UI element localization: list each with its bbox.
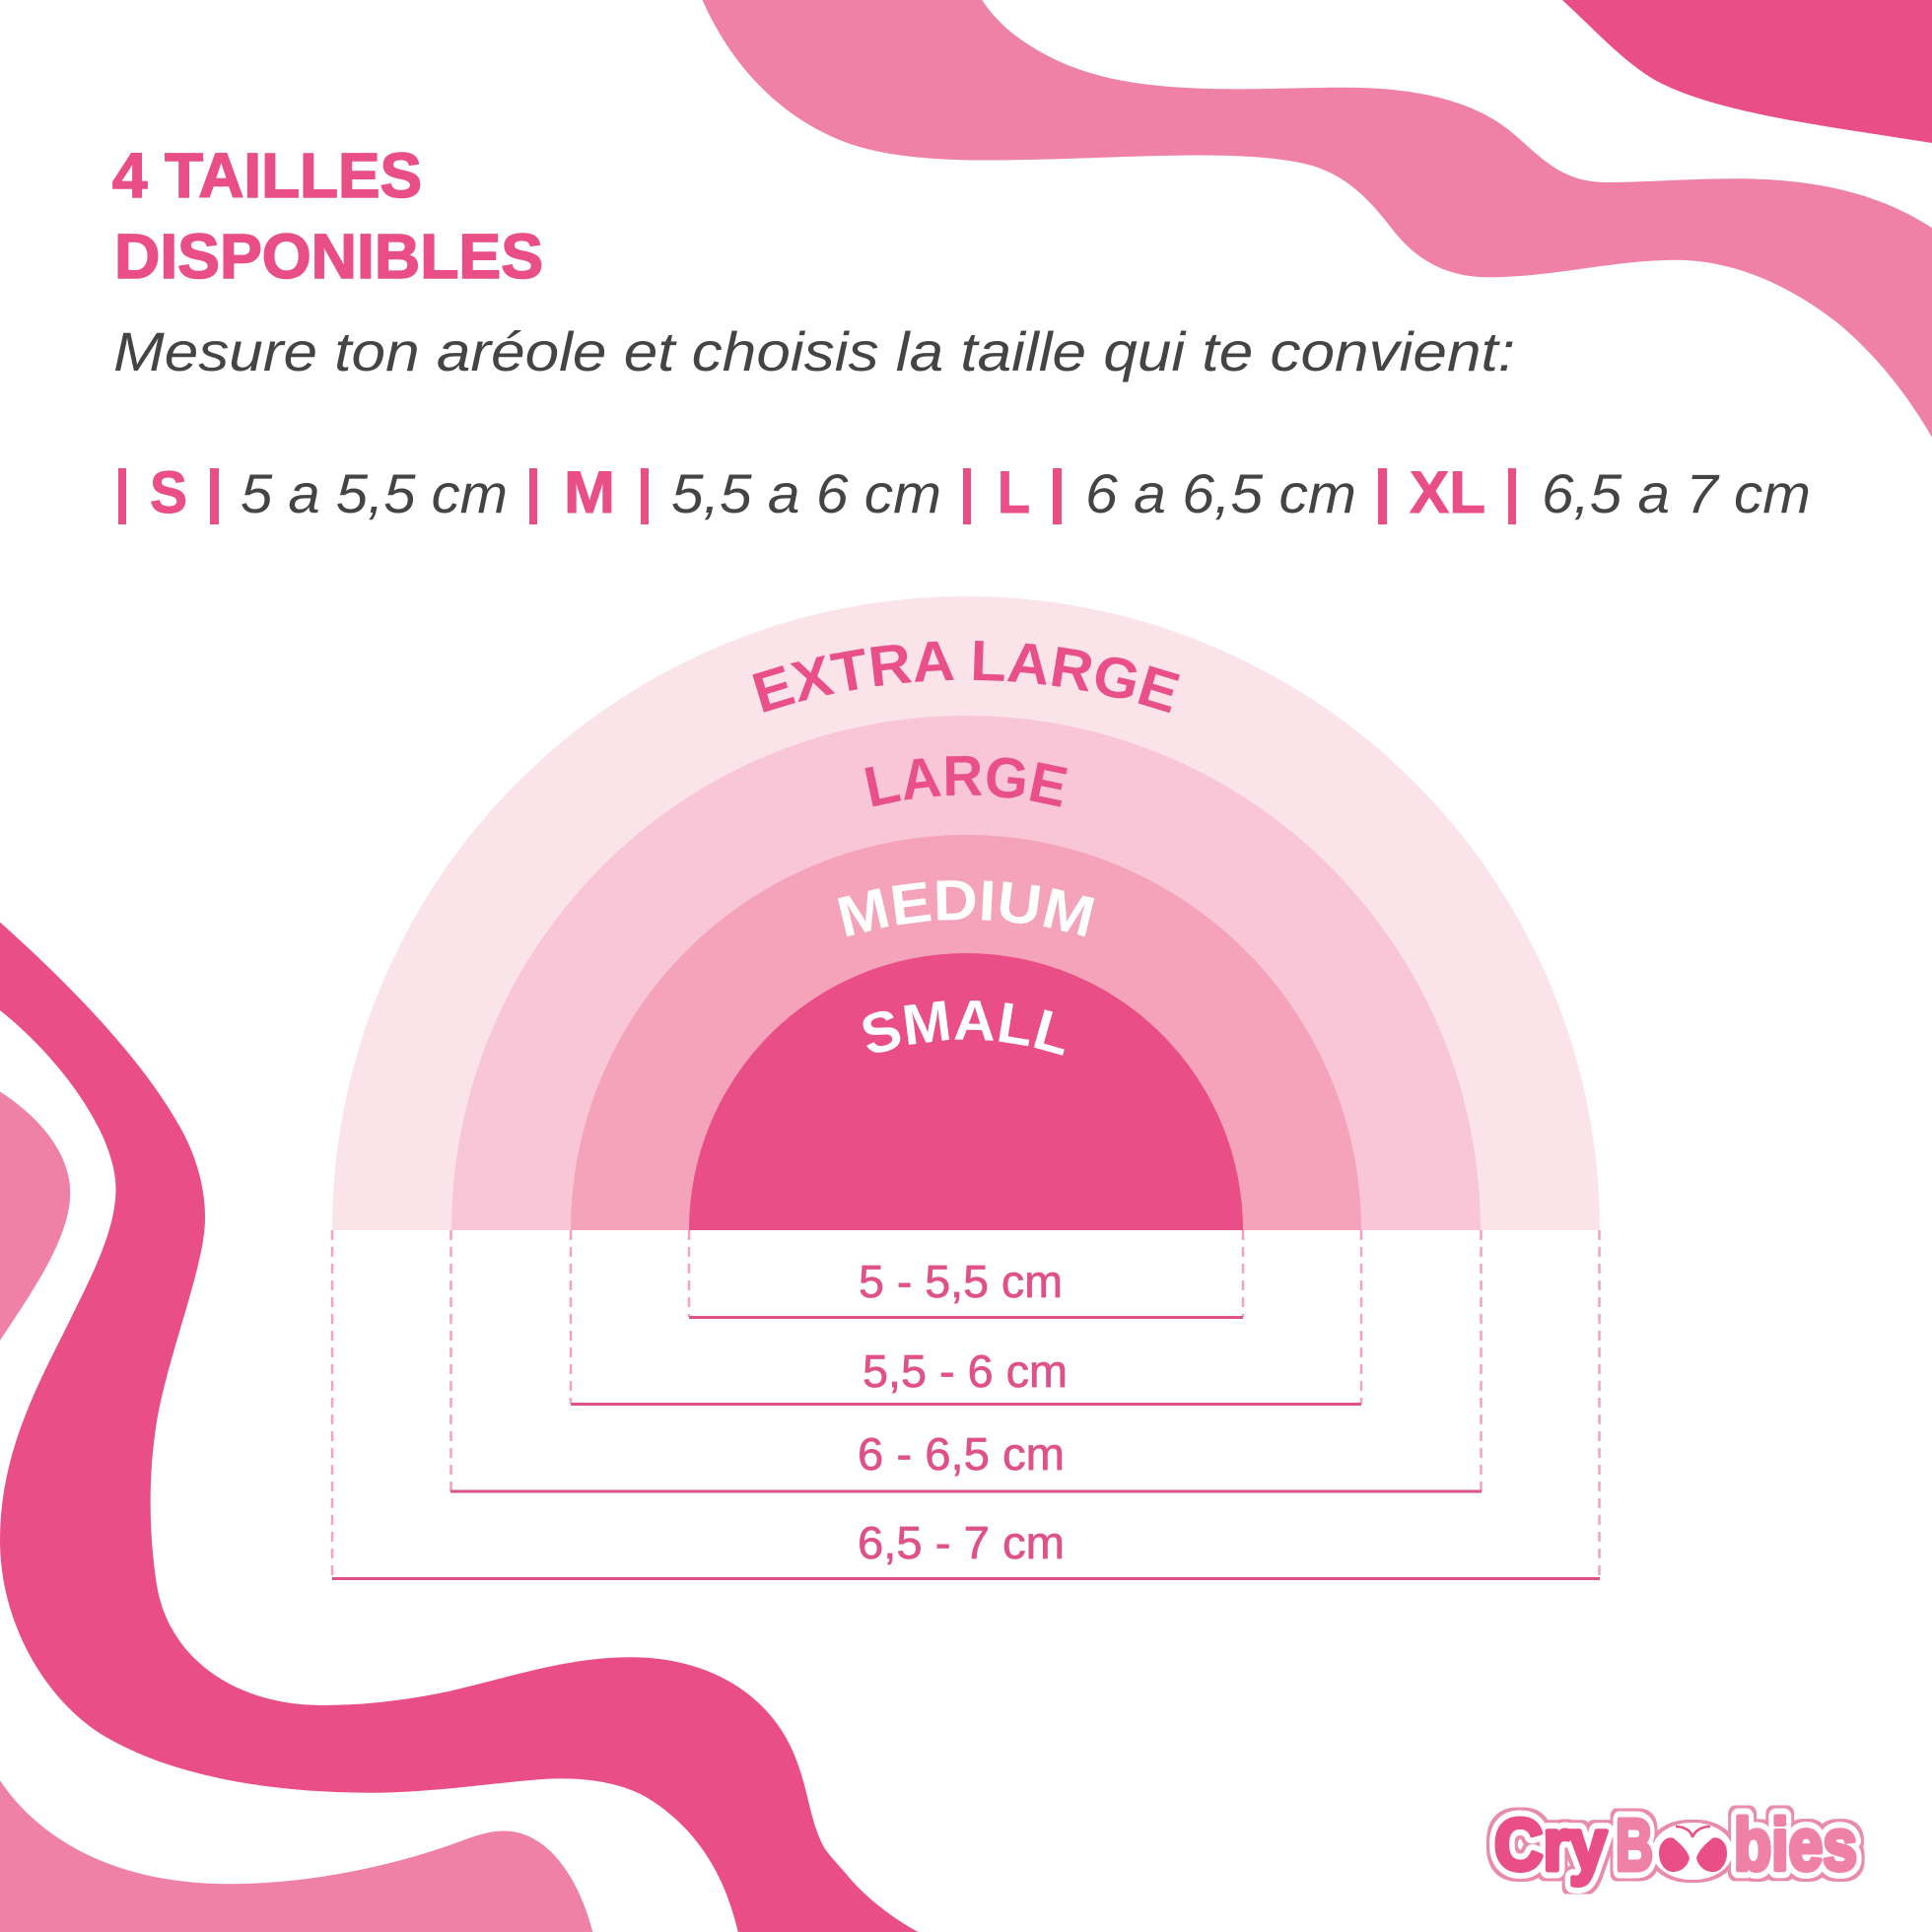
dimension: medium [571, 1230, 1361, 1404]
background wave: bottom left light pink [0, 1780, 592, 1932]
band: small [689, 953, 1243, 1230]
size S [118, 459, 508, 525]
background wave: top light pink [702, 0, 1932, 438]
band: medium [571, 835, 1361, 1230]
title: 4 TAILLES [112, 140, 422, 211]
title: DISPONIBLES [114, 221, 543, 292]
dimension: small: 5 - 5,5 cm [859, 1256, 1063, 1307]
logo: CryBoobies [1494, 1804, 1857, 1886]
size XL: 6,5 a 7 cm [1542, 462, 1811, 524]
rainbow size chart [332, 596, 1600, 1230]
background wave: left light pink [0, 1092, 70, 1341]
size M: M [564, 459, 615, 525]
size L: L [998, 459, 1030, 525]
dimension: large [450, 1230, 1482, 1491]
size L [963, 459, 1356, 525]
logo lettering: bies [1734, 1804, 1857, 1886]
size L: 6 a 6,5 cm [1085, 462, 1356, 524]
logo icon: breasts [1659, 1827, 1727, 1872]
dimension: medium: 5,5 - 6 cm [862, 1346, 1068, 1397]
band: large [451, 716, 1481, 1230]
size M [529, 459, 941, 525]
dimension: large: 6 - 6,5 cm [858, 1428, 1065, 1480]
size list row [118, 459, 1811, 525]
label: extra large: EXTRA LARGE [752, 641, 1180, 714]
background wave: top right dark pink [1562, 0, 1932, 143]
logo outline: bies [1734, 1804, 1857, 1886]
label: large: LARGE [865, 756, 1068, 807]
size M: 5,5 a 6 cm [671, 462, 941, 524]
size XL: XL [1410, 459, 1485, 525]
size XL [1378, 459, 1811, 525]
dimension: small [689, 1230, 1243, 1317]
dimension brackets [332, 1230, 1600, 1579]
logo outline: Cry [1494, 1804, 1607, 1886]
size S: 5 a 5,5 cm [241, 462, 508, 524]
subtitle: Mesure ton aréole et choisis la taille qui te convient: [113, 320, 1515, 382]
band: extra large [332, 596, 1600, 1230]
dimension: extra large: 6,5 - 7 cm [858, 1517, 1065, 1568]
label: small: SMALL [862, 1000, 1065, 1056]
title [112, 140, 543, 292]
logo lettering [1494, 1804, 1857, 1886]
logo lettering: Cry [1494, 1804, 1607, 1886]
label: medium: MEDIUM [838, 880, 1094, 936]
dimension: extra large [332, 1230, 1600, 1579]
logo outline: B [1616, 1804, 1653, 1886]
logo outline [1494, 1804, 1857, 1886]
logo lettering: B [1616, 1804, 1653, 1886]
size S: S [150, 459, 187, 525]
background wave: bottom left dark band [0, 923, 918, 1932]
